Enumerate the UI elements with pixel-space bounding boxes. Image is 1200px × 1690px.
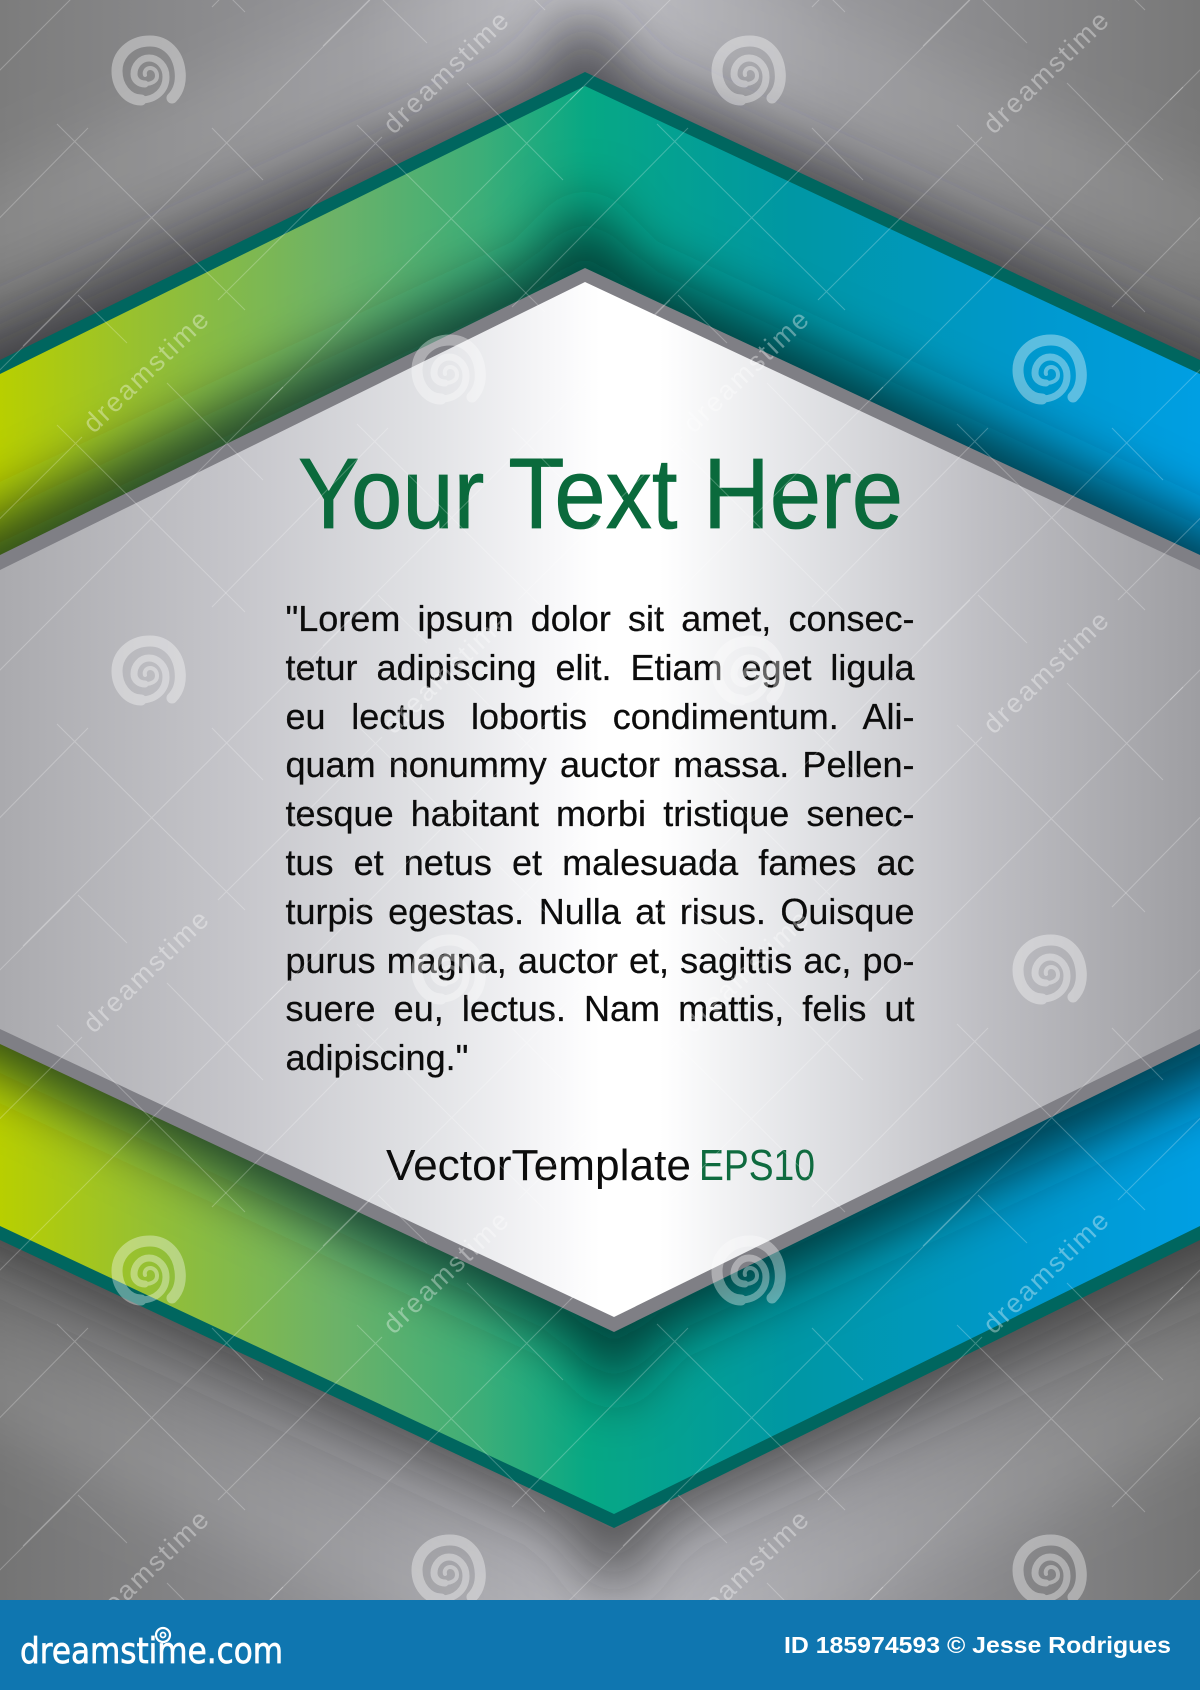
body paragraph: tesque habitant morbi tristique senec- bbox=[286, 793, 914, 834]
watermark wordmarks: dreamstime bbox=[677, 904, 814, 1039]
watermark wordmarks: dreamstime bbox=[977, 5, 1114, 140]
watermark wordmarks: dreamstime bbox=[377, 5, 514, 140]
panel: central silver hexagon bbox=[0, 268, 1200, 1332]
watermark spirals bbox=[117, 41, 1081, 1599]
body paragraph: "Lorem ipsum dolor sit amet, consec- bbox=[286, 598, 914, 639]
body paragraph: suere eu, lectus. Nam mattis, felis ut bbox=[286, 988, 914, 1029]
watermark wordmarks: dreamstime bbox=[677, 1504, 814, 1639]
body paragraph bbox=[286, 598, 915, 1078]
watermark wordmarks: dreamstime bbox=[377, 1205, 514, 1340]
watermark wordmarks: dreamstime bbox=[977, 1205, 1114, 1340]
body paragraph: eu lectus lobortis condimentum. Ali- bbox=[286, 696, 914, 737]
watermark wordmarks: dreamstime bbox=[677, 304, 814, 439]
chevron: top colour band bbox=[0, 72, 1200, 555]
body paragraph: adipiscing." bbox=[286, 1037, 468, 1078]
body paragraph: quam nonummy auctor massa. Pellen- bbox=[286, 744, 914, 785]
tagline: Vector Template EPS10: VectorTemplate bbox=[386, 1141, 691, 1190]
watermark wordmarks: dreamstime bbox=[77, 304, 214, 439]
watermark wordmarks: dreamstime bbox=[377, 605, 514, 740]
footer bar bbox=[0, 1600, 1200, 1690]
body paragraph: purus magna, auctor et, sagittis ac, po- bbox=[286, 940, 914, 981]
image id and credit: ID 185974593 © Jesse Rodrigues bbox=[784, 1632, 1171, 1658]
chevron: bottom colour band bbox=[0, 1044, 1200, 1528]
watermark wordmarks: dreamstime bbox=[77, 1504, 214, 1639]
watermark wordmarks: dreamstime bbox=[77, 904, 214, 1039]
body paragraph: tus et netus et malesuada fames ac bbox=[286, 842, 914, 883]
body paragraph: tetur adipiscing elit. Etiam eget ligula bbox=[286, 647, 914, 688]
body paragraph: turpis egestas. Nulla at risus. Quisque bbox=[286, 891, 914, 932]
footer logo wordmark: dreamstime.com bbox=[20, 1631, 283, 1672]
title: Your Text Here bbox=[298, 438, 903, 550]
footer logo spiral bbox=[156, 1628, 170, 1642]
tagline: Vector Template EPS10: EPS10 bbox=[699, 1141, 815, 1190]
watermark wordmarks: dreamstime bbox=[977, 605, 1114, 740]
